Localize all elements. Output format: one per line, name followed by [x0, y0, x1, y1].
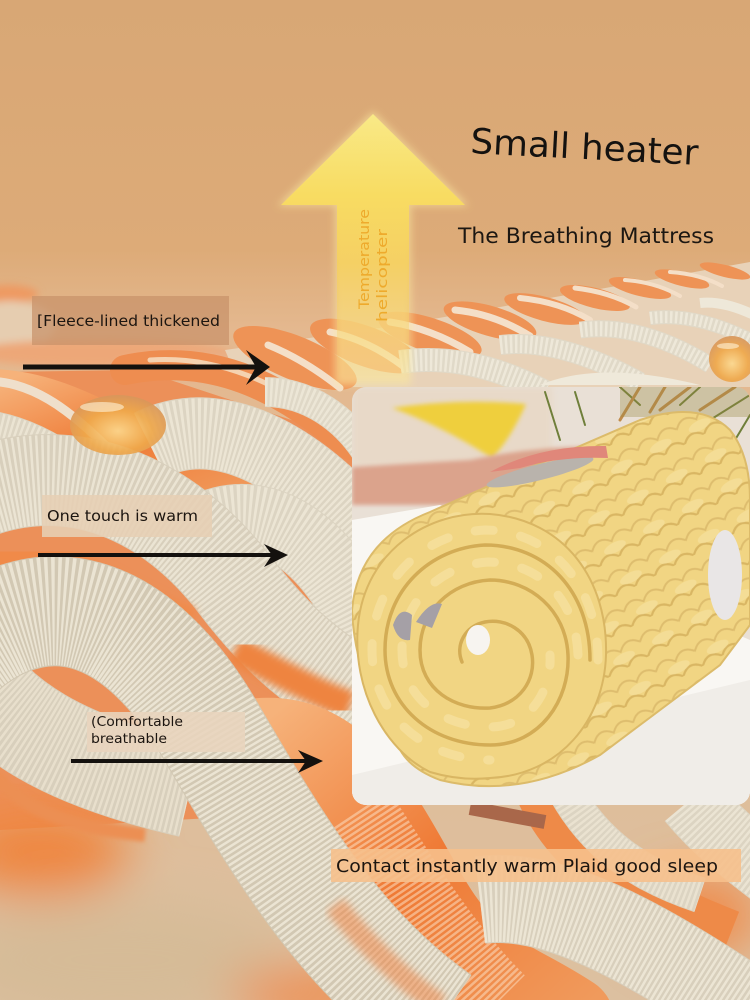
callout: comfortable: [87, 712, 245, 752]
rope base fill: [0, 370, 352, 830]
rope: mid left orange and cream: [0, 359, 380, 720]
arm: [352, 447, 608, 505]
upper rope row: [225, 259, 750, 403]
icon: water bubble left: [70, 395, 166, 455]
icon: water bubble right: [709, 336, 750, 382]
arrow: temperature up arrow: [277, 111, 469, 385]
plant leaves: [545, 387, 750, 440]
rope: large lower twist: [0, 611, 750, 1000]
hand: [490, 446, 608, 472]
photo: rolled mattress: [352, 387, 750, 805]
arrow: fleece-lined: [23, 350, 270, 385]
white bed: [352, 505, 750, 805]
callout: contact warm: [331, 849, 741, 882]
roll end spiral: [357, 514, 606, 779]
arrow: one touch: [38, 544, 288, 567]
blurred bottom glow: [0, 805, 750, 1000]
title: Small heater: [470, 122, 700, 174]
subtitle: The Breathing Mattress: [457, 224, 714, 248]
callout: one touch: [42, 495, 212, 537]
callout: comfortable: (Comfortable: [91, 715, 183, 730]
roll body: [352, 412, 750, 786]
callout: fleece-lined: [Fleece-lined thickened: [37, 312, 220, 330]
arrow label: temperature: Temperature: [357, 209, 373, 310]
callout: comfortable: breathable: [91, 732, 167, 747]
fabric dots: [393, 603, 442, 640]
arrow label: helicopter: helicopter: [375, 229, 391, 322]
callout: one touch: One touch is warm: [47, 507, 198, 525]
callout: fleece-lined: [32, 296, 229, 345]
callout: contact warm: Contact instantly warm Plaid good sleep: [336, 856, 718, 877]
arrow: comfortable: [71, 750, 323, 773]
blurred left rope background: [0, 285, 270, 382]
motion blur yellow: [392, 402, 526, 458]
